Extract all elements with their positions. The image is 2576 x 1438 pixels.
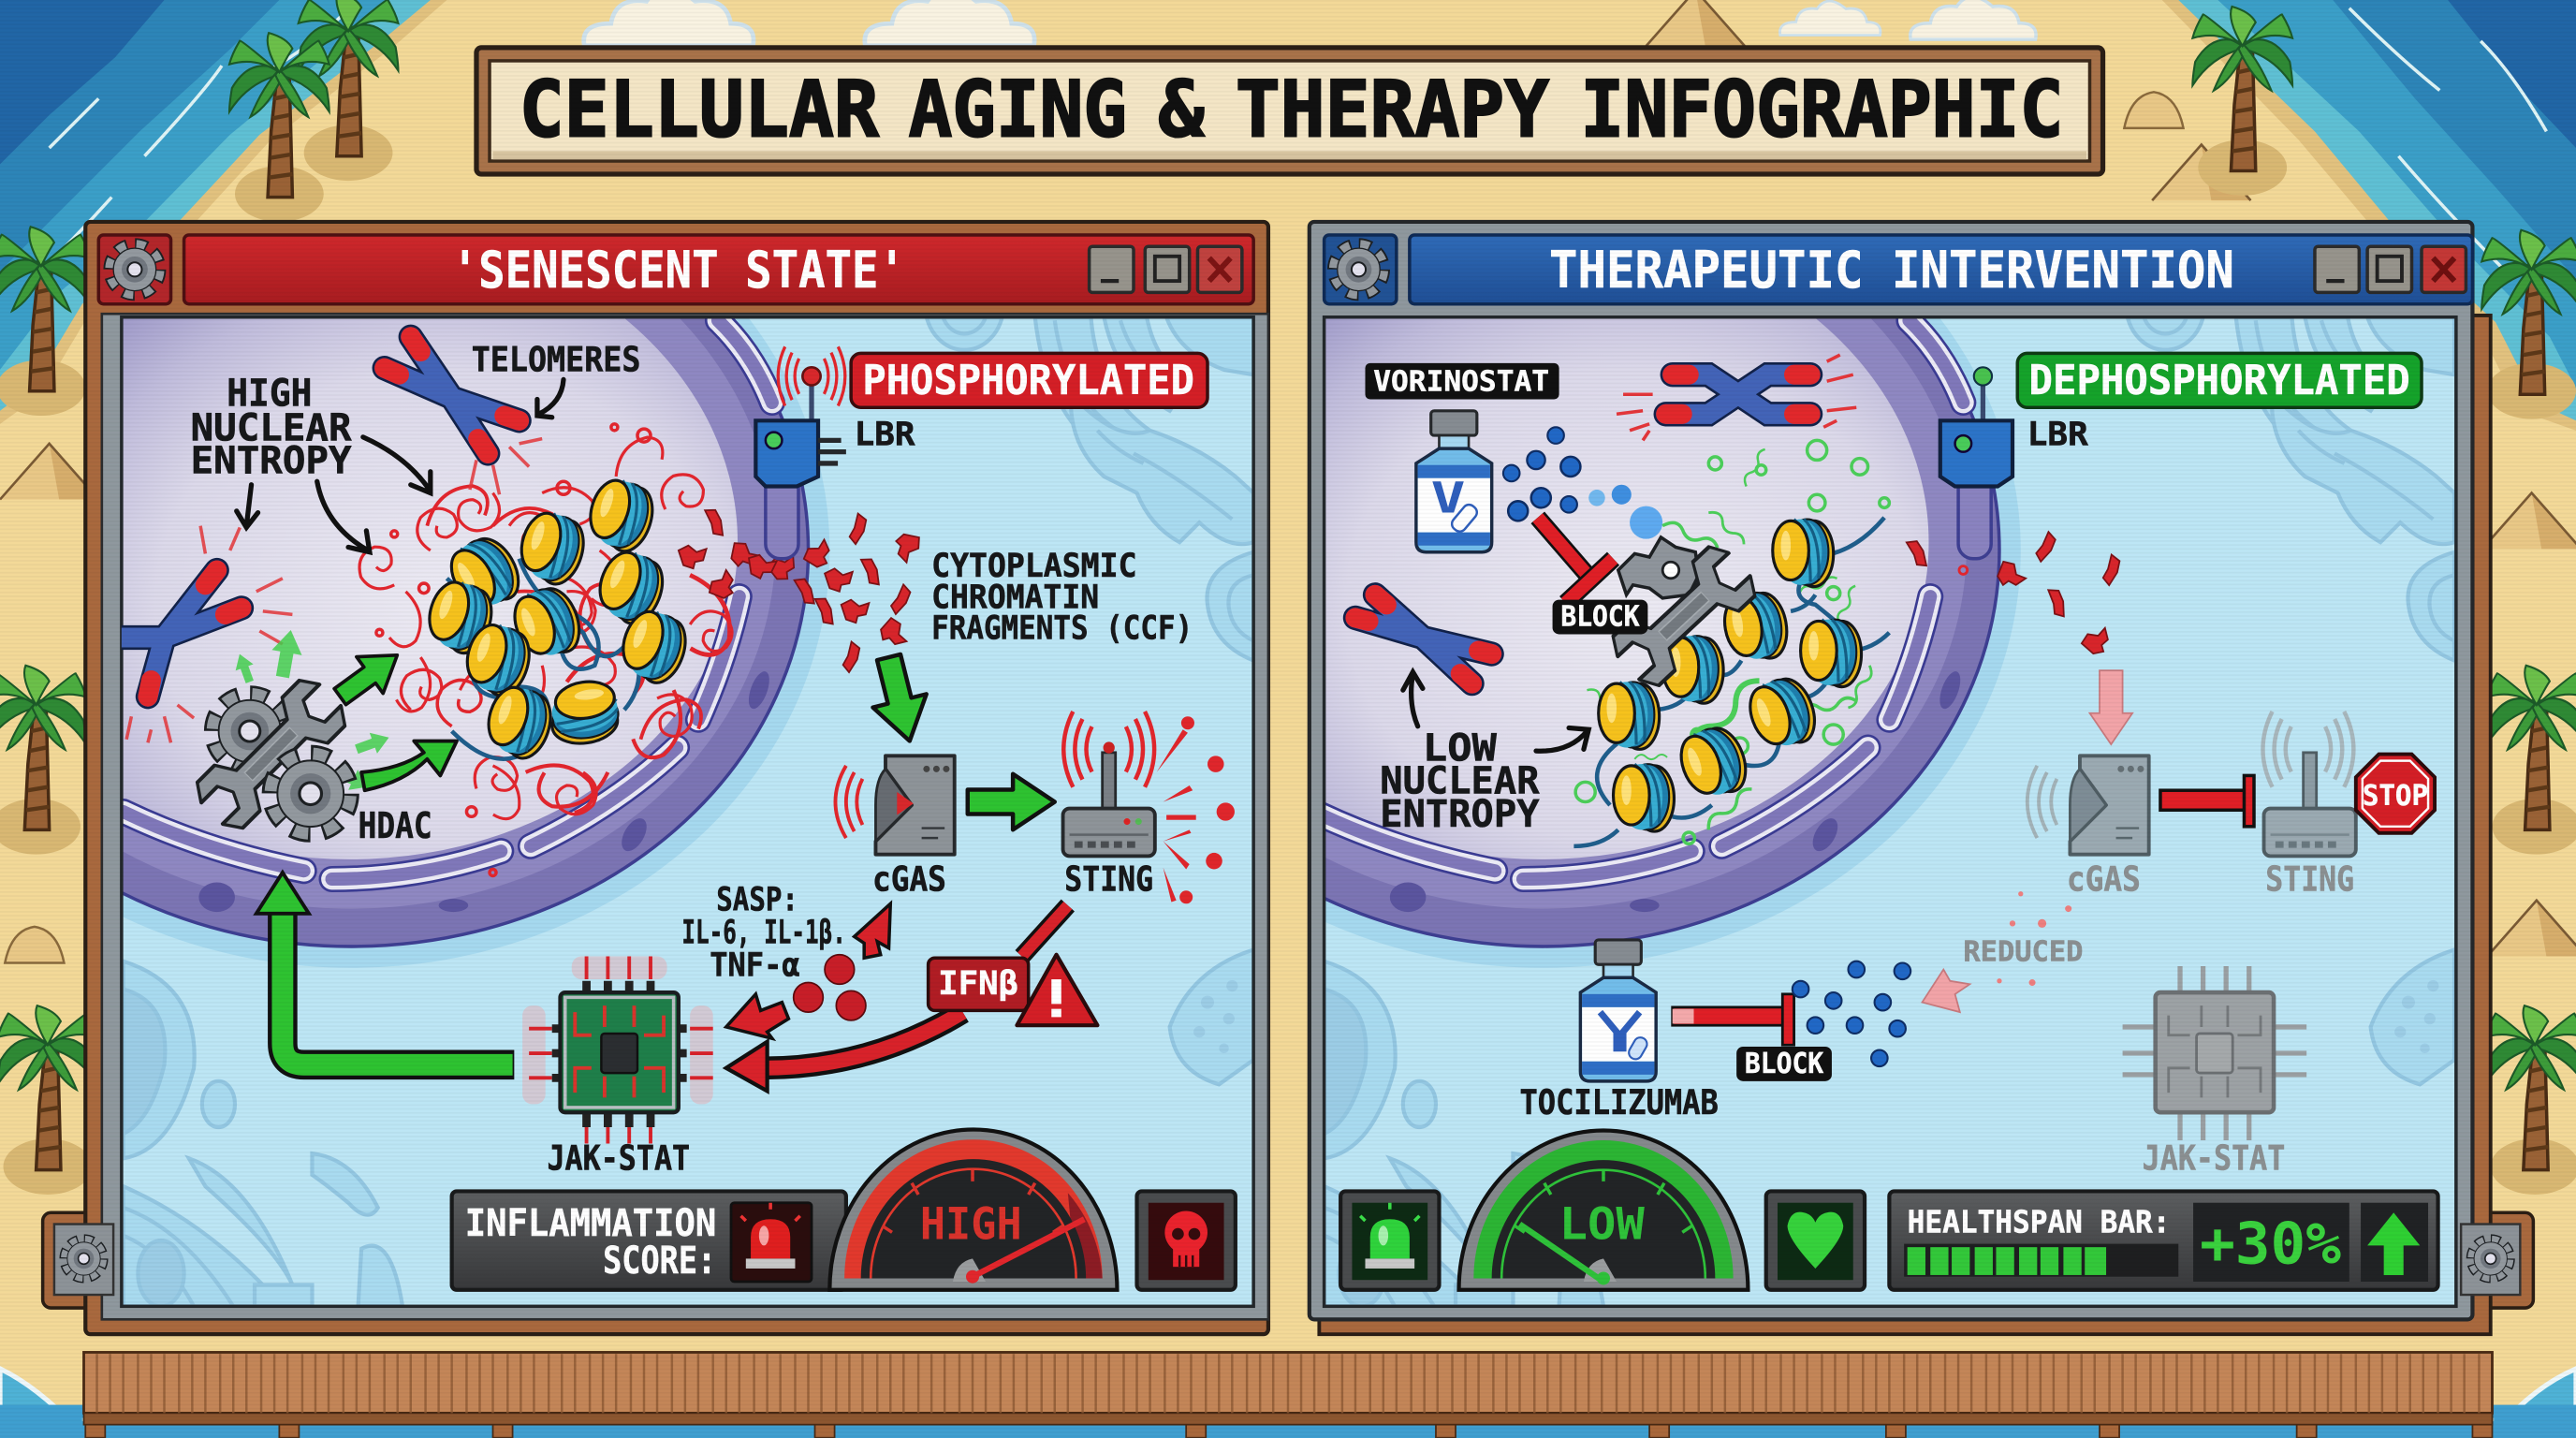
dna strand right (1573, 518, 1889, 846)
lbr receptor dephosphorylated (1940, 367, 2012, 559)
label high nuclear entropy (191, 372, 352, 482)
window frame left (43, 222, 1268, 1334)
palm tree left upper (0, 227, 91, 416)
sting red sparks (1157, 716, 1235, 903)
arrow sting to ifn to jak (726, 905, 1068, 1091)
sting router icon (1063, 712, 1155, 856)
palm tree right lower (2485, 1005, 2576, 1195)
ifn beta label: IFNβ (938, 964, 1018, 1003)
label sasp: IL-6, IL-1β. (681, 913, 846, 951)
chromosome telomeres (385, 337, 520, 453)
label sasp (681, 880, 846, 985)
window buttons left (1090, 246, 1242, 292)
arrow ccf to cgas (862, 651, 936, 748)
label high nuclear entropy: ENTROPY (191, 438, 352, 482)
label cGAS inactive: cGAS (2067, 858, 2141, 899)
black annotation arrows (237, 379, 564, 552)
label high nuclear entropy: NUCLEAR (191, 405, 352, 449)
label reduced with sparse particles: REDUCED (1963, 936, 2083, 969)
ifn beta label (929, 958, 1029, 1010)
title banner: INFOGRAPHIC (1580, 66, 2063, 155)
skull box (1137, 1191, 1236, 1290)
inflammation gauge (829, 1130, 1117, 1290)
cytokine particles blocked (1793, 961, 1910, 1066)
heart box (1766, 1191, 1865, 1290)
reduced fragments (1907, 532, 2122, 659)
gauge low (1459, 1131, 1748, 1290)
red inhibitor tocilizumab (1673, 994, 1794, 1045)
label low nuclear entropy: NUCLEAR (1380, 759, 1540, 803)
label JAK-STAT: JAK-STAT (547, 1138, 690, 1179)
label cytoplasmic chromatin fragments: CHROMATIN (931, 578, 1099, 616)
inflammation gauge: HIGH (920, 1198, 1022, 1250)
healthspan bar panel: +30% (2200, 1211, 2341, 1278)
label low nuclear entropy (1380, 726, 1540, 836)
label block tocilizumab: BLOCK (1745, 1048, 1823, 1080)
label sasp: TNF-α (710, 946, 800, 985)
blue drug particles (1503, 427, 1662, 539)
sasp particles and arrows (726, 903, 890, 1038)
jak-stat chip (522, 956, 713, 1144)
label cytoplasmic chromatin fragments: FRAGMENTS (CCF) (931, 609, 1193, 648)
chromosome left (115, 570, 242, 697)
label vorinostat: VORINOSTAT (1373, 366, 1549, 399)
stop sign (2356, 755, 2435, 833)
hdac icon (189, 672, 353, 836)
panel: therapeutic intervention (1307, 219, 2535, 1337)
label cGAS: cGAS (872, 858, 946, 899)
green feedback arrow (256, 873, 514, 1064)
heading: senescent state: 'SENESCENT STATE' (452, 241, 905, 300)
label reduced with sparse particles (1963, 891, 2083, 986)
chromosome left right-panel (1355, 594, 1492, 683)
vorinostat vial (1416, 411, 1492, 552)
window frame right (1310, 222, 2533, 1334)
label tocilizumab: TOCILIZUMAB (1519, 1082, 1719, 1123)
ccf fragments (679, 506, 923, 673)
corner gear left (54, 1225, 113, 1295)
heading: therapeutic intervention: THERAPEUTIC INTERVENTION (1549, 241, 2234, 300)
tocilizumab vial (1580, 940, 1656, 1081)
healthspan bar panel (1889, 1191, 2438, 1290)
telomere sparks right (1617, 355, 1856, 440)
wooden dock (0, 1352, 2576, 1438)
cgas icon (835, 756, 955, 855)
cgas icon inactive (2027, 756, 2149, 855)
cell interior left (124, 318, 1252, 1305)
sting icon inactive (2262, 712, 2356, 856)
green repair marks (1575, 440, 1889, 844)
panel: senescent state (0, 133, 1268, 1334)
title banner: CELLULAR (520, 66, 879, 155)
stop sign: STOP (2363, 780, 2428, 813)
window buttons right (2315, 246, 2466, 292)
palm tree top left front (229, 33, 329, 222)
warning triangle (1017, 955, 1097, 1025)
palm tree right upper (2481, 230, 2576, 419)
label high nuclear entropy: HIGH (227, 372, 312, 416)
label HDAC: HDAC (359, 805, 432, 847)
palm tree left middle (0, 666, 86, 855)
red inhibitor cgas to sting (2160, 775, 2254, 827)
healthspan bar panel: HEALTHSPAN BAR: (1908, 1203, 2170, 1240)
label JAK-STAT inactive: JAK-STAT (2143, 1138, 2285, 1179)
pink arrow (2089, 670, 2132, 744)
corner gear right (2461, 1225, 2520, 1295)
telomere sparks (126, 439, 542, 742)
nucleosomes right (1599, 520, 1862, 831)
chromosome right top (1666, 374, 1810, 414)
badge dephosphorylated: DEPHOSPHORYLATED (2029, 357, 2410, 404)
label cytoplasmic chromatin fragments (931, 547, 1193, 648)
chromatin squiggles (351, 424, 739, 875)
title banner: & (1158, 66, 1205, 155)
title banner (476, 48, 2103, 174)
label STING inactive: STING (2265, 858, 2354, 899)
broken hdac icon (1605, 537, 1763, 693)
label telomeres: TELOMERES (472, 340, 640, 380)
black annotation arrows right (1403, 672, 1588, 751)
arrow cgas to sting (968, 774, 1055, 829)
red block inhibitor (1538, 518, 1614, 603)
palm tree top left (299, 0, 398, 181)
green arrows to chromatin (327, 637, 457, 790)
palm tree top right (2192, 7, 2292, 196)
badge phosphorylated: PHOSPHORYLATED (862, 357, 1194, 404)
label low nuclear entropy: ENTROPY (1380, 792, 1540, 836)
label low nuclear entropy: LOW (1423, 726, 1498, 770)
dna strand left (446, 542, 649, 759)
small green arrows (230, 627, 393, 797)
label LBR: LBR (855, 416, 915, 454)
gauge low: LOW (1559, 1198, 1645, 1250)
vorinostat vial: V (1431, 474, 1466, 523)
label STING: STING (1064, 858, 1153, 899)
palm tree right middle (2487, 666, 2576, 855)
green siren box (1340, 1191, 1439, 1290)
inflammation score panel: SCORE: (603, 1239, 716, 1283)
label cytoplasmic chromatin fragments: CYTOPLASMIC (931, 547, 1137, 585)
lbr receptor phosphorylated (755, 346, 846, 559)
title banner: AGING (909, 66, 1127, 155)
pink arrow reduced (1922, 970, 1969, 1012)
inflammation score panel: INFLAMMATION (465, 1201, 716, 1245)
label block: BLOCK (1560, 601, 1640, 634)
label sasp: SASP: (716, 880, 798, 918)
title banner: THERAPY (1236, 66, 1549, 155)
jak-stat chip inactive (2123, 966, 2306, 1140)
label LBR right: LBR (2027, 416, 2089, 454)
nucleosomes left (420, 474, 694, 764)
inflammation score panel (452, 1191, 846, 1290)
cell interior right (1325, 318, 2454, 1305)
palm tree left lower (0, 1005, 97, 1195)
